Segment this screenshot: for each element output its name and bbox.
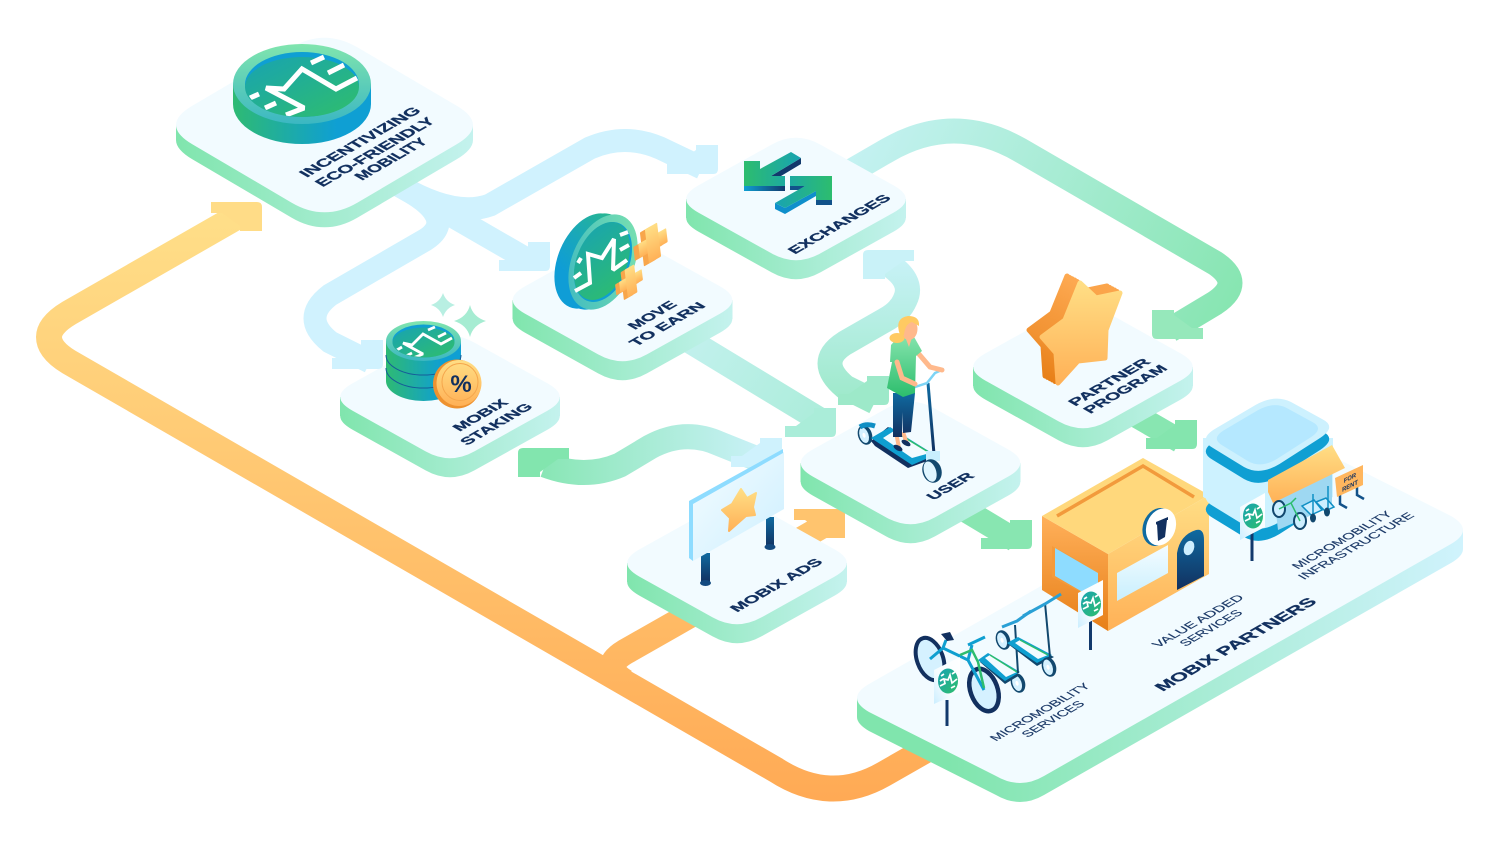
arrow: user towards mobix ads xyxy=(780,509,845,551)
label: move to earn: TO EARN xyxy=(625,300,709,348)
arrow pipes: light blue distribution from incentives xyxy=(315,140,702,362)
label: move to earn: MOVE xyxy=(623,298,681,332)
arrow head: to user from exchanges xyxy=(838,376,889,405)
arrow head: to staking xyxy=(332,340,383,369)
panel: incentivizing eco-friendly mobility xyxy=(176,38,473,227)
arrow pipe: user and exchanges loop xyxy=(830,262,908,402)
icon: partner program star xyxy=(1029,276,1120,383)
label: partner program: PARTNER xyxy=(1064,356,1154,408)
panel: mobix ads xyxy=(627,502,847,643)
arrow head: to exchanges xyxy=(667,145,718,174)
panel: mobix partners xyxy=(857,445,1463,802)
label: micromobility services: SERVICES xyxy=(1018,699,1088,739)
icon: exchange arrows xyxy=(744,152,832,214)
panel: move to earn xyxy=(512,239,732,380)
label: move to earn xyxy=(623,298,709,348)
label: micromobility infrastructure: INFRASTRUCTURE xyxy=(1295,510,1417,582)
icon: move to earn coin xyxy=(541,203,651,320)
label: mobix ads: MOBIX ADS xyxy=(726,556,826,614)
label: partner program xyxy=(1064,356,1171,416)
icon: orange plus signs xyxy=(614,218,669,304)
icon: sign at building xyxy=(1240,493,1265,561)
icon: large mobix coin xyxy=(233,44,371,144)
arrow pipes: green into partners xyxy=(965,415,1180,540)
icon: mini rental bike and scooters xyxy=(1273,486,1334,529)
icon: billboard xyxy=(689,449,784,586)
label: mobix staking xyxy=(448,396,536,447)
arrow head: to user from move to earn xyxy=(785,408,836,437)
arrow head: to exchanges from user xyxy=(863,250,914,279)
label: user: USER xyxy=(922,470,978,502)
arrow head: to partner program xyxy=(1152,310,1203,339)
label: micromobility services: MICROMOBILITY xyxy=(986,681,1094,743)
arrow head: user to partners xyxy=(981,520,1032,549)
label: incentivizing eco-friendly mobility: MOBILITY xyxy=(351,136,432,183)
icon: value added services shop xyxy=(1042,458,1209,631)
panel: user xyxy=(800,402,1020,543)
panel: partner program xyxy=(973,306,1193,447)
icon: for rent sign xyxy=(1335,465,1364,508)
arrow pipe: main token flow from partners back to incentives xyxy=(49,215,940,789)
label: mobix staking: STAKING xyxy=(456,401,536,447)
icon: for rent sign: FOR xyxy=(1344,472,1356,485)
icon: infrastructure building xyxy=(1203,399,1345,541)
label: incentivizing eco-friendly mobility: INCENTIVIZING xyxy=(295,105,425,180)
panel: exchanges xyxy=(686,138,906,279)
label: partner program: PROGRAM xyxy=(1079,362,1171,416)
icon: sign at shop xyxy=(1078,580,1103,650)
icon: for rent sign: RENT xyxy=(1342,479,1358,494)
icon: rider on kick scooter xyxy=(855,316,945,485)
icon: bicycle and scooters xyxy=(910,594,1061,715)
label: micromobility infrastructure: MICROMOBILITY xyxy=(1288,509,1396,571)
icon: percent coin xyxy=(433,360,482,408)
label: value added services: SERVICES xyxy=(1176,608,1246,648)
label: mobix partners: MOBIX PARTNERS xyxy=(1151,596,1322,694)
arrow head: from ads xyxy=(731,438,782,467)
arrow pipe: exchanges to partner program xyxy=(850,131,1230,330)
icon: staking coin stack xyxy=(386,321,461,401)
panel: mobix staking xyxy=(340,336,560,477)
arrow head: to move to earn xyxy=(499,242,550,271)
arrow head: to staking from ads xyxy=(518,448,569,477)
icon: sign at bicycle xyxy=(934,657,960,726)
label: mobix staking: MOBIX xyxy=(448,396,512,433)
icon: percent coin: % xyxy=(450,371,472,398)
label: incentivizing eco-friendly mobility xyxy=(295,105,440,189)
label: exchanges: EXCHANGES xyxy=(784,192,894,256)
arrow head: into incentives xyxy=(211,202,262,231)
arrow head: partner program to partners xyxy=(1146,420,1197,449)
label: incentivizing eco-friendly mobility: ECO-FRIENDLY xyxy=(311,115,440,189)
icon: sparkles xyxy=(431,293,486,337)
arrow pipe: move to earn to user xyxy=(680,335,825,423)
arrow pipe: ads to staking xyxy=(545,437,765,472)
label: value added services: VALUE ADDED xyxy=(1149,592,1248,650)
